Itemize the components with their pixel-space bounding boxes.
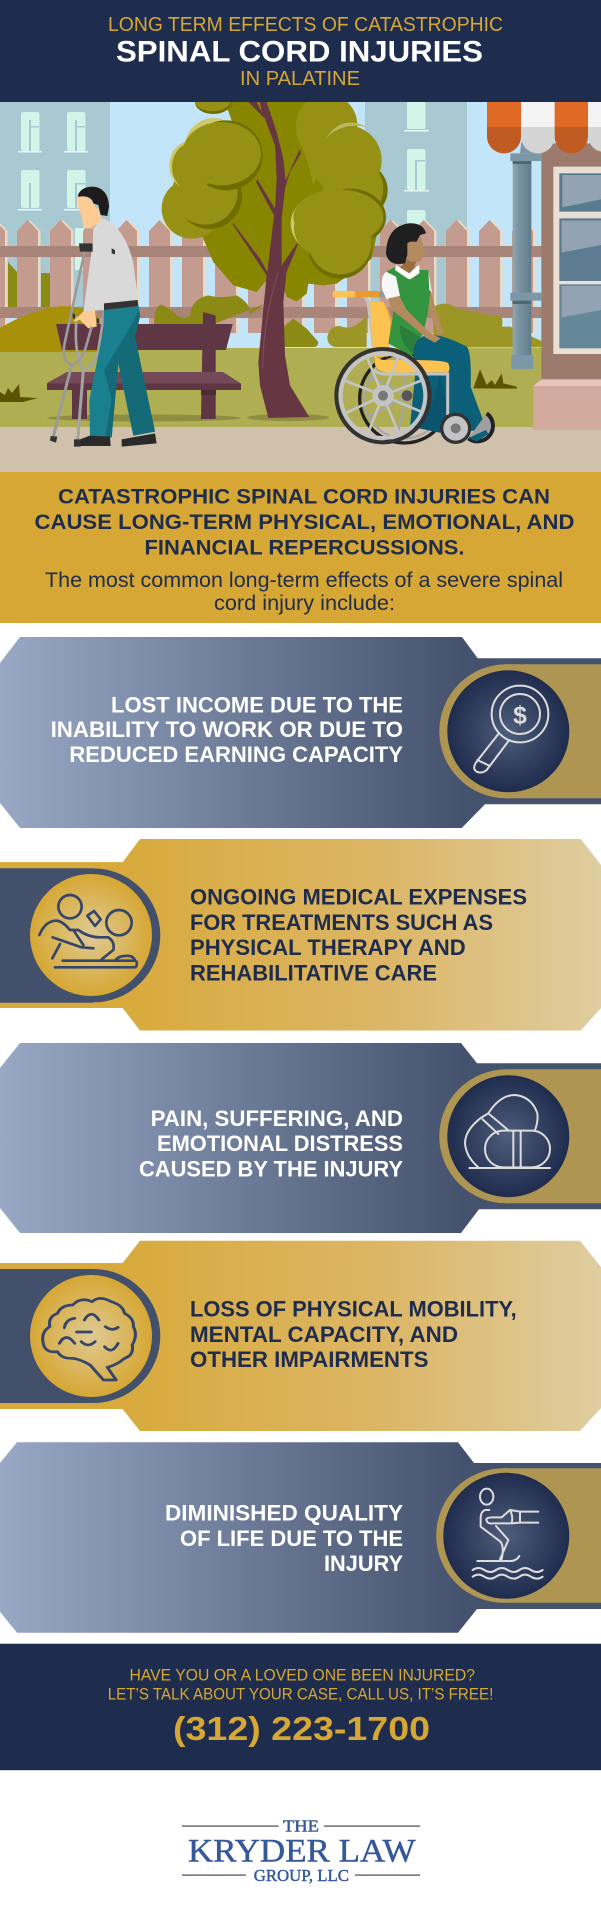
rear wheel — [360, 354, 449, 443]
awning — [487, 101, 601, 153]
cta text: LET’S TALK ABOUT YOUR CASE, CALL US, IT’S FREE! — [108, 1685, 493, 1703]
shadows under tree and bench — [47, 414, 329, 422]
intro body — [45, 569, 563, 615]
illustration: park street scene — [0, 90, 601, 472]
man: shirt — [83, 218, 138, 312]
cta text — [108, 1667, 493, 1703]
arms — [388, 290, 444, 343]
man: hand — [73, 310, 97, 328]
mobility text: OTHER IMPAIRMENTS — [190, 1347, 428, 1372]
quality of life text: OF LIFE DUE TO THE — [180, 1526, 403, 1551]
title line 2: SPINAL CORD INJURIES — [116, 36, 483, 68]
phone number: (312) 223-1700 — [173, 1710, 430, 1747]
picket fence — [0, 220, 545, 333]
man: belt — [104, 300, 138, 310]
head — [406, 235, 426, 262]
intro heading: FINANCIAL REPERCUSSIONS. — [144, 535, 464, 559]
neck — [400, 258, 416, 274]
pain text — [139, 1106, 403, 1182]
icon: magnifying glass with dollar: $ — [513, 702, 527, 729]
intro heading — [34, 484, 574, 559]
medical expenses text: REHABILITATIVE CARE — [190, 960, 437, 986]
man: head — [78, 196, 102, 228]
sleeves — [382, 271, 432, 299]
intro heading: CATASTROPHIC SPINAL CORD INJURIES CAN — [58, 484, 550, 508]
medical expenses text: PHYSICAL THERAPY AND — [190, 935, 466, 960]
header banner — [0, 0, 601, 102]
man: front crutch — [53, 250, 92, 437]
intro body: cord injury include: — [214, 592, 395, 615]
title line 1: LONG TERM EFFECTS OF CATASTROPHIC — [108, 14, 503, 36]
panel: loss of mobility — [0, 1241, 601, 1431]
mobility text — [190, 1297, 517, 1372]
pain text: EMOTIONAL DISTRESS — [157, 1131, 403, 1156]
panel: lost income — [0, 637, 601, 828]
grass and pavement — [0, 348, 601, 472]
drain pipe — [510, 140, 541, 369]
intro heading: CAUSE LONG-TERM PHYSICAL, EMOTIONAL, AND — [34, 510, 574, 534]
medical expenses text: FOR TREATMENTS SUCH AS — [190, 910, 493, 935]
medical expenses text: ONGOING MEDICAL EXPENSES — [190, 885, 527, 910]
storefront — [487, 101, 601, 430]
man: trousers — [89, 306, 155, 437]
panel: medical expenses — [0, 839, 601, 1030]
collar — [395, 265, 419, 279]
tree: left foliage — [162, 118, 263, 239]
woman in wheelchair — [333, 223, 493, 443]
title line 3: IN PALATINE — [240, 68, 360, 90]
icon: water skier — [473, 1489, 543, 1579]
chair handle — [333, 291, 385, 350]
pain text: PAIN, SUFFERING, AND — [151, 1106, 403, 1131]
chair back — [370, 302, 393, 357]
quality of life text — [165, 1501, 403, 1576]
lost income text: INABILITY TO WORK OR DUE TO — [51, 717, 403, 742]
icon: brain — [43, 1298, 135, 1380]
medical expenses text — [190, 885, 527, 986]
trousers — [410, 335, 487, 433]
man: rear crutch — [74, 303, 106, 440]
mobility text: MENTAL CAPACITY, AND — [190, 1322, 458, 1347]
intro body: The most common long-term effects of a severe spinal — [45, 569, 563, 592]
icon: pills — [465, 1095, 550, 1168]
panel: quality of life — [0, 1442, 601, 1633]
logo: Kryder Law Group — [182, 1817, 420, 1885]
man on crutches — [50, 187, 157, 447]
shop wall — [541, 143, 601, 381]
tree — [162, 90, 388, 418]
lost income text: REDUCED EARNING CAPACITY — [69, 742, 403, 767]
front wheel — [336, 349, 430, 442]
logo: Kryder Law Group: GROUP, LLC — [254, 1866, 349, 1885]
lost income text: LOST INCOME DUE TO THE — [111, 692, 403, 717]
cta text: HAVE YOU OR A LOVED ONE BEEN INJURED? — [130, 1667, 475, 1685]
tree: right foliage — [291, 94, 388, 279]
lost income text — [51, 692, 403, 767]
logo: Kryder Law Group: THE — [283, 1817, 319, 1836]
icon: magnifying glass with dollar — [474, 686, 548, 773]
pain text: CAUSED BY THE INJURY — [139, 1157, 403, 1182]
man: shoes — [74, 433, 157, 447]
grass tufts — [0, 369, 517, 402]
icon: physical therapy — [39, 895, 137, 967]
bushes — [0, 295, 550, 352]
bench — [47, 312, 241, 419]
tree: back foliage — [190, 102, 377, 301]
seat — [375, 355, 449, 372]
tree: trunk — [232, 102, 309, 418]
mobility text: LOSS OF PHYSICAL MOBILITY, — [190, 1297, 517, 1322]
background buildings — [0, 102, 467, 318]
quality of life text: INJURY — [324, 1551, 403, 1576]
logo: Kryder Law Group: KRYDER LAW — [188, 1834, 416, 1870]
dress — [386, 267, 431, 357]
panel: call to action — [0, 1644, 601, 1770]
quality of life text: DIMINISHED QUALITY — [165, 1501, 403, 1526]
panel: pain and suffering — [0, 1043, 601, 1233]
small wheels — [442, 413, 493, 442]
panel: intro — [0, 472, 601, 623]
